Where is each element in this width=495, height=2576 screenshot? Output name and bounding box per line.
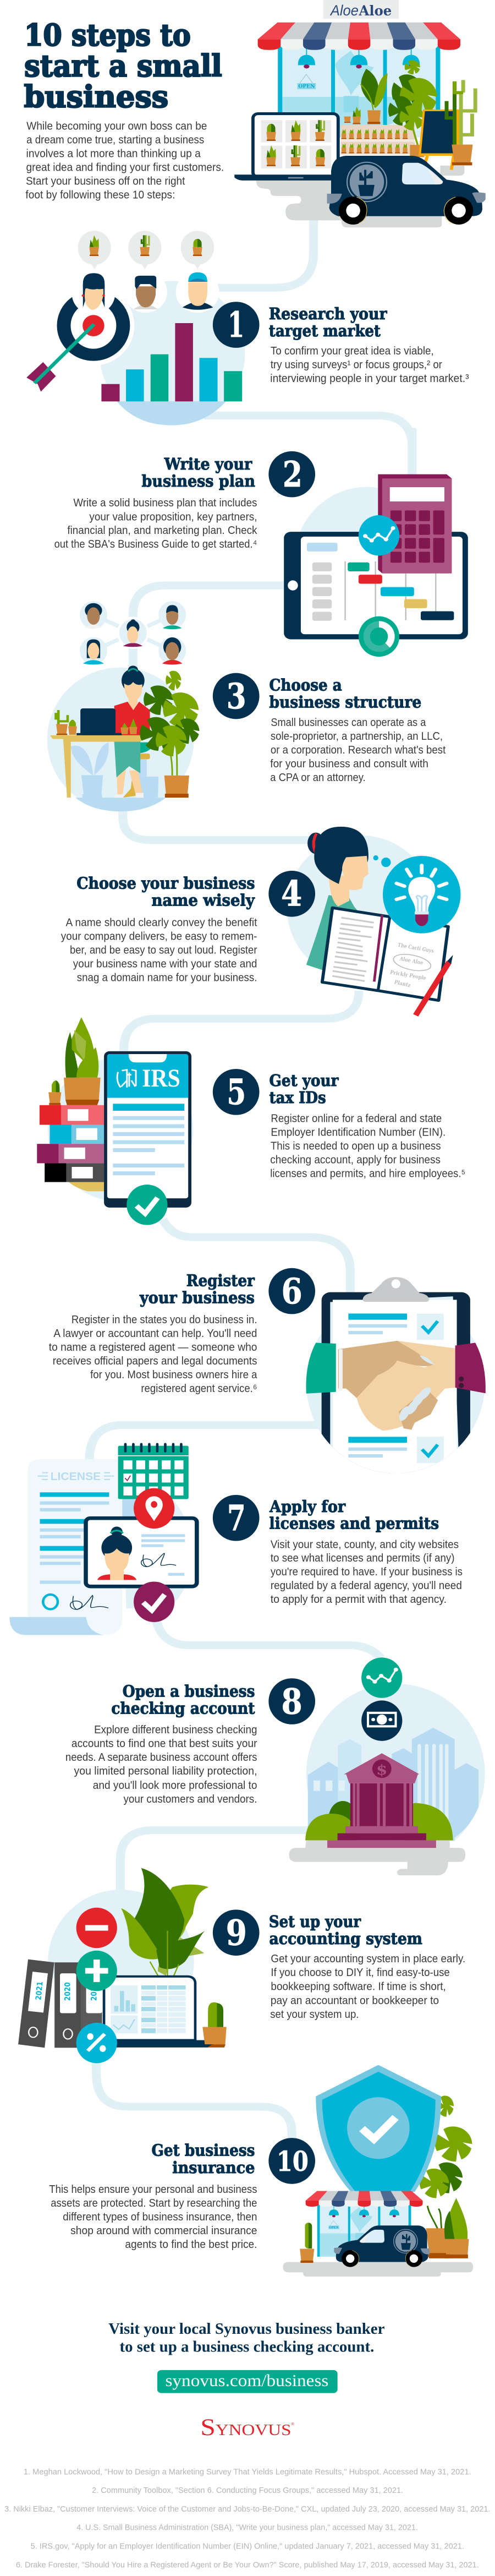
illustration: woman thinking with notebook and lightbulb: The Cacti Guys — [397, 942, 435, 954]
body text: accounts to find one that best suits your — [72, 1737, 257, 1750]
illustration: woman thinking with notebook and lightbulb: Plantz — [394, 979, 411, 989]
illustration: woman thinking with notebook and lightbulb: Aloe Aloe — [399, 956, 424, 966]
intro text: great idea and finding your first customers. — [26, 161, 224, 173]
body text: regulated by a federal agency, you'll need — [271, 1579, 462, 1592]
body text: or a corporation. Research what's best — [271, 744, 446, 756]
heading — [139, 1271, 255, 1307]
body text: bookkeeping software. If time is short, — [271, 1980, 446, 1993]
body text — [270, 345, 469, 385]
body text — [61, 916, 257, 984]
body text: Register online for a federal and state — [271, 1112, 442, 1125]
illustration: IRS phone — [104, 1051, 191, 1225]
number badge 1: 1 — [228, 304, 244, 345]
person: man with cap — [176, 271, 219, 313]
logo: AloeAloe — [323, 0, 399, 19]
logo: Synovus: ® — [292, 2422, 294, 2426]
number badge 6 — [268, 1268, 315, 1314]
heading: Get your — [270, 1072, 339, 1090]
body text: This helps ensure your personal and business — [49, 2183, 257, 2196]
body text: different types of business insurance, then — [63, 2211, 257, 2223]
number badge 5 — [213, 1069, 260, 1115]
icon: plus — [76, 1951, 117, 1991]
person: man — [124, 271, 167, 313]
logo: Synovus: SYNOVUS — [200, 2414, 292, 2441]
body text: financial plan, and marketing plan. Check — [67, 524, 257, 537]
heading: your business — [139, 1289, 255, 1307]
body text — [49, 1314, 257, 1395]
bar chart — [101, 323, 242, 401]
body text: your company delivers, be easy to remem- — [61, 930, 257, 942]
illustration: binders and plants — [37, 1017, 193, 1202]
icon: check — [134, 1581, 174, 1622]
icon: growth chart circle — [361, 1657, 402, 1698]
body text: Small businesses can operate as a — [271, 716, 426, 729]
title — [24, 18, 222, 114]
body text: Register in the states you do business in. — [72, 1314, 257, 1326]
illustration: IRS phone: IRS — [142, 1063, 180, 1092]
icon: map pin — [134, 1488, 174, 1529]
body text: to apply for a permit with that agency. — [271, 1593, 447, 1606]
body text: for you. Most business owners hire a — [90, 1368, 257, 1381]
intro text: While becoming your own boss can be — [26, 120, 207, 132]
illustration: bank — [289, 1684, 485, 1875]
body text: assets are protected. Start by researching the — [51, 2197, 257, 2209]
step 6 — [49, 1268, 486, 1489]
number badge 7 — [213, 1495, 260, 1541]
step 9 — [18, 1868, 465, 2063]
person: woman — [72, 272, 115, 314]
number badge 4 — [268, 871, 315, 917]
body text — [270, 1952, 465, 2021]
number badge 9: 9 — [226, 1912, 247, 1953]
body text — [271, 1538, 463, 1606]
number badge 9 — [213, 1909, 260, 1956]
body text — [65, 1723, 257, 1805]
body text: set your system up. — [270, 2008, 359, 2021]
heading: Set up your — [269, 1913, 361, 1931]
header section — [24, 0, 486, 227]
title: start a small — [24, 48, 222, 84]
body text: shop around with commercial insurance — [70, 2224, 257, 2237]
connector path between sections — [89, 220, 412, 2143]
icon: percent — [76, 2023, 117, 2063]
step 2 — [54, 451, 468, 657]
heading — [269, 1498, 439, 1533]
illustration: woman thinking with notebook and lightbulb: Prickly People — [389, 969, 427, 981]
heading: insurance — [172, 2159, 255, 2177]
heading: licenses and permits — [270, 1514, 439, 1533]
number badge 10: 10 — [277, 2146, 309, 2177]
body text: your value proposition, key partners, — [89, 511, 257, 523]
heading: Choose your business — [76, 874, 255, 893]
illustration: license document — [9, 1459, 193, 1635]
number badge 4: 4 — [281, 873, 302, 914]
body text: registered agent service.⁶ — [141, 1382, 257, 1395]
heading — [270, 1072, 339, 1107]
heading — [142, 455, 255, 491]
illustration: binders, laptop and plant — [18, 1868, 227, 2048]
illustration: binders, laptop and plant: 2021 — [35, 1981, 45, 2000]
icon: calendar — [118, 1444, 189, 1499]
heading — [269, 1913, 422, 1949]
intro text: Start your business off on the right — [26, 175, 185, 187]
button: synovus.com/business: synovus.com/business — [165, 2372, 328, 2390]
footnotes — [4, 2468, 490, 2569]
body text: your business name with your state and — [73, 958, 257, 970]
illustration: storefront, laptop and van — [234, 23, 486, 227]
body text: agents to find the best price. — [125, 2238, 257, 2251]
heading — [152, 2142, 255, 2177]
illustration: license document: LICENSE — [51, 1470, 101, 1483]
body text: pay an accountant or bookkeeper to — [271, 1994, 439, 2007]
icon: minus — [76, 1908, 117, 1948]
body text: receives official papers and legal documents — [53, 1355, 257, 1367]
body text: to name a registered agent — someone who — [49, 1341, 257, 1354]
heading: target market — [269, 322, 381, 340]
heading: Research your — [269, 305, 387, 323]
heading: checking account — [111, 1699, 255, 1718]
body text — [270, 1112, 465, 1180]
heading: Get business — [151, 2142, 255, 2160]
number badge 5: 5 — [227, 1071, 246, 1112]
number badge 2 — [268, 451, 315, 497]
call to action — [108, 2320, 384, 2355]
number badge 3: 3 — [227, 675, 246, 717]
number badge 8: 8 — [282, 1681, 302, 1722]
heading: Write your — [164, 455, 252, 473]
step 4 — [61, 827, 461, 1016]
footnotes: 4. U.S. Small Business Administration (SBA), "Write your business plan," accessed May 31, 2021. — [76, 2523, 418, 2532]
illustration: woman at desk with plant — [47, 665, 199, 812]
step 1 — [26, 231, 469, 425]
panel: blob background — [100, 281, 245, 425]
body text: A name should clearly convey the benefit — [65, 916, 257, 929]
number badge 6: 6 — [282, 1270, 302, 1312]
heading: Open a business — [123, 1682, 255, 1701]
heading: Apply for — [269, 1498, 346, 1516]
body text: A lawyer or accountant can help. You'll need — [53, 1328, 257, 1340]
body text: checking account, apply for business — [270, 1154, 441, 1166]
body text: If you choose to DIY it, find easy-to-use — [271, 1966, 450, 1979]
step 8 — [65, 1657, 485, 1875]
logo: AloeAloe: Aloe — [359, 3, 392, 19]
heading: Choose a — [270, 676, 342, 695]
footnotes: 2. Community Toolbox, "Section 6. Conducting Focus Groups," accessed May 31, 2021. — [92, 2486, 403, 2495]
heading: Register — [186, 1271, 255, 1290]
title: business — [24, 79, 168, 114]
number badge 10 — [268, 2138, 315, 2184]
body text — [49, 2183, 257, 2251]
heading — [111, 1682, 255, 1718]
body text: try using surveys¹ or focus groups,² or — [271, 358, 442, 371]
number badge 1 — [213, 302, 260, 348]
illustration: tablet, calculator, gantt chart — [284, 474, 468, 657]
heading: business structure — [270, 693, 421, 712]
icon: money circle — [361, 1700, 402, 1741]
number badge 7: 7 — [227, 1497, 246, 1538]
body text — [54, 497, 257, 550]
body text: to see what licenses and permits (if any) — [271, 1552, 455, 1564]
number badge 8 — [268, 1678, 315, 1724]
body text: This is needed to open up a business — [271, 1140, 441, 1152]
heading — [270, 676, 421, 712]
body text: ber, and be easy to say out loud. Register — [70, 944, 257, 956]
illustration: binders, laptop and plant: 2020 — [64, 1982, 73, 2001]
body text: To confirm your great idea is viable, — [271, 345, 434, 357]
body text: for your business and consult with — [270, 757, 428, 770]
logo: AloeAloe: Aloe — [329, 3, 359, 19]
body text: and you'll look more professional to — [93, 1779, 257, 1792]
body text: interviewing people in your target market.³ — [270, 372, 469, 385]
body text: Write a solid business plan that includes — [73, 497, 257, 509]
intro text: foot by following these 10 steps: — [25, 189, 175, 201]
body text — [270, 716, 446, 784]
illustration: bank: $ — [376, 1762, 387, 1778]
illustration: clipboard and handshake — [306, 1277, 486, 1489]
intro text: involves a lot more than thinking up a — [26, 148, 201, 160]
icon: speech bubbles with plants — [78, 231, 214, 270]
body text: a CPA or an attorney. — [270, 771, 366, 784]
body text: sole-proprietor, a partnership, an LLC, — [271, 730, 443, 743]
step 3 — [47, 601, 446, 812]
intro text — [25, 120, 224, 201]
heading: accounting system — [270, 1930, 422, 1949]
body text: snag a domain name for your business. — [77, 972, 257, 984]
call to action: Visit your local Synovus business banker — [108, 2320, 384, 2338]
heading: name wisely — [151, 892, 255, 910]
step 7 — [9, 1444, 463, 1635]
network of people — [80, 601, 186, 664]
body text: Explore different business checking — [94, 1723, 257, 1736]
body text: out the SBA's Business Guide to get started.⁴ — [54, 538, 257, 550]
body text: your customers and vendors. — [123, 1793, 257, 1805]
illustration: binders, laptop and plant: 2019 — [90, 1982, 99, 2001]
heading: business plan — [142, 472, 255, 491]
icon: target with arrow — [26, 286, 134, 391]
body text: needs. A separate business account offers — [65, 1751, 257, 1764]
icon: ID card — [86, 1518, 197, 1586]
step 5 — [37, 1017, 465, 1225]
call to action: to set up a business checking account. — [119, 2338, 374, 2355]
illustration: shield, mini storefront and van — [283, 2065, 473, 2277]
number badge 3 — [213, 673, 260, 719]
body text: Employer Identification Number (EIN). — [271, 1126, 446, 1138]
title: 10 steps to — [24, 18, 191, 53]
body text: Visit your state, county, and city websites — [271, 1538, 459, 1551]
heading — [269, 305, 387, 340]
step 10 — [4, 2065, 490, 2569]
body text: you limited personal liability protection, — [74, 1765, 257, 1777]
illustration: woman thinking with notebook and lightbulb — [287, 827, 461, 1016]
number badge 2: 2 — [283, 454, 302, 495]
heading — [76, 874, 255, 910]
intro text: a dream come true, starting a business — [26, 134, 204, 146]
heading: tax IDs — [270, 1089, 326, 1107]
